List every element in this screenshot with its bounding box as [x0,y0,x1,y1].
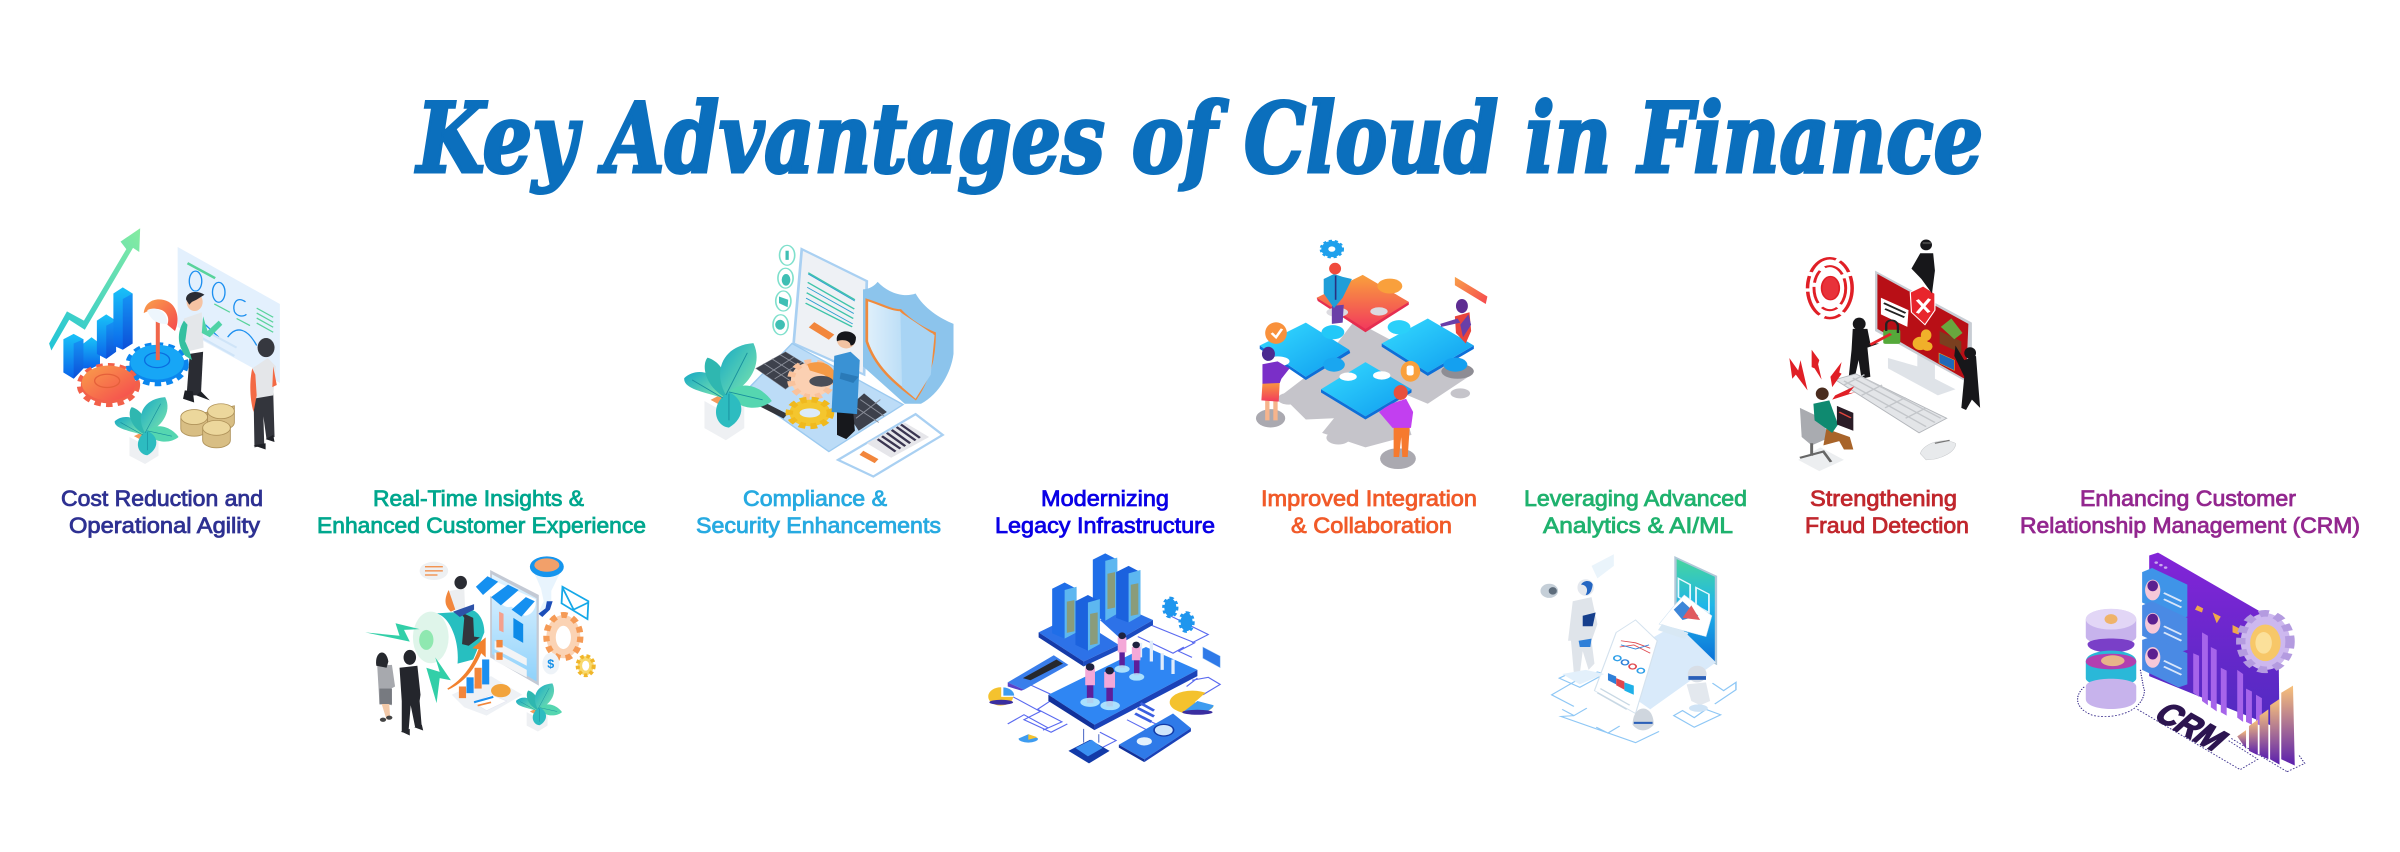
lightning bolts [365,623,451,703]
dashboard board [178,247,280,383]
label: modernizing: Modernizing [1041,486,1169,511]
growth arrow [49,228,140,351]
person bottom [1379,385,1416,469]
monitor screen [1875,271,1972,385]
small robot [1687,666,1710,712]
profile cards [2142,568,2187,687]
dashboard board [2149,553,2279,729]
label: customer relationship: Enhancing Customer [2080,486,2296,511]
label: fraud detection [1805,486,1969,538]
label: compliance: Security Enhancements [696,513,941,538]
laptop base [745,343,903,452]
small chip [1203,647,1220,668]
notification badge [1401,361,1420,382]
gear icon [1321,241,1343,257]
plant [115,397,179,464]
rack terminals [1141,641,1173,674]
label: modernizing: Legacy Infrastructure [995,513,1215,538]
main platform [1048,647,1197,730]
label: cost reduction: Cost Reduction and [61,486,263,511]
coin stacks [181,404,234,448]
panel: compliance illustration [684,245,954,477]
megaphone [413,610,484,664]
wallet with cash [1940,319,1963,353]
label: cost reduction [61,486,263,538]
laptop screen [794,249,867,375]
label: integration: & Collaboration [1291,513,1452,538]
panel: real-time insights illustration [365,556,594,736]
label: analytics [1524,486,1747,538]
panel: analytics illustration [1540,554,1736,743]
plant [516,683,562,732]
bars [2237,686,2295,765]
label: modernizing [995,486,1215,538]
panel: integration illustration [1256,241,1487,469]
label: customer relationship [2020,486,2360,538]
shield [863,282,954,404]
credit card [1939,353,1954,370]
phone storefront [476,570,539,686]
tablet [1675,558,1716,664]
pie charts [988,687,1214,743]
puzzle piece orange [1317,275,1409,332]
dollar bubble [542,653,559,674]
person [832,331,860,439]
label: integration [1261,486,1477,538]
growth arrow and bars [447,637,522,716]
dashed outlines [2078,670,2305,772]
person observing [250,338,277,449]
orange gear [81,365,136,403]
person presenting [179,292,222,402]
target [1808,258,1852,318]
lightning bolts [1789,350,1856,400]
chat bubble [420,562,448,580]
check badge [1265,322,1287,344]
label: real-time insights: Enhanced Customer Experience [317,513,646,538]
label: compliance: Compliance & [743,486,887,511]
label: integration: Improved Integration [1261,486,1477,511]
password note [1881,298,1909,327]
gears [546,615,594,675]
people [1080,632,1144,710]
gauge [144,299,178,360]
coins [1913,329,1933,351]
circuit outline [1552,672,1736,743]
lock [1883,320,1900,344]
label: fraud detection: Fraud Detection [1805,513,1969,538]
card with barcode [838,414,943,477]
envelope [562,587,588,619]
seated person [1798,388,1853,471]
funnel [530,556,564,617]
server towers [1052,553,1141,651]
man [400,650,423,736]
blue gear [129,345,185,383]
panel: fraud detection illustration [1789,240,1980,471]
label: analytics: Leveraging Advanced [1524,486,1747,511]
title: Key Advantages of Cloud in Finance [414,82,1983,195]
person right [1440,299,1471,343]
plant [684,343,772,440]
thief left [1849,318,1891,379]
camera [1540,584,1558,598]
dollar bubble: $ [547,658,555,671]
bar chart [63,287,133,379]
label: analytics: Analytics & AI/ML [1543,513,1733,538]
server platforms [1039,607,1153,667]
puzzle piece blue left [1260,323,1350,380]
panel: crm illustration [2078,553,2305,772]
thief right [1954,346,1980,410]
humanoid robot [1562,579,1604,684]
label: customer relationship: Relationship Management (CRM) [2020,513,2360,538]
storage module [1008,655,1068,691]
label: fraud detection: Strengthening [1810,486,1957,511]
router [1068,729,1110,763]
label: real-time insights [317,486,646,538]
seated person [446,576,480,646]
floating document [1658,595,1712,639]
person left [1256,347,1290,427]
dome sensor [1633,709,1654,730]
icon badges [773,245,795,335]
person top [1324,263,1352,324]
keyboard [1835,374,1947,433]
panel: legacy infrastructure illustration [988,553,1220,763]
woman [376,652,395,722]
puzzle piece blue right [1382,319,1474,376]
label: cost reduction: Operational Agility [69,513,260,538]
printed report [1594,620,1657,714]
label: compliance [696,486,941,538]
panel: cost reduction illustration [49,228,280,464]
base block [1636,624,1716,709]
crm lettering: CRM [2146,697,2236,757]
thief top [1911,240,1935,294]
data steps [1135,703,1154,722]
circuit lines [1008,616,1220,749]
puzzle piece blue bottom [1321,362,1412,420]
shadow puzzle pieces [1278,321,1474,447]
monitor stand [1888,350,1955,395]
label: real-time insights: Real-Time Insights & [373,486,584,511]
speech bubble [1592,554,1614,578]
gears [1164,598,1193,631]
secure device [1119,714,1191,762]
database stack [2086,609,2136,709]
shield [1910,286,1935,325]
mouse [1920,440,1956,460]
gears [789,362,837,426]
gear [2241,613,2290,670]
speech banner [1455,277,1487,304]
